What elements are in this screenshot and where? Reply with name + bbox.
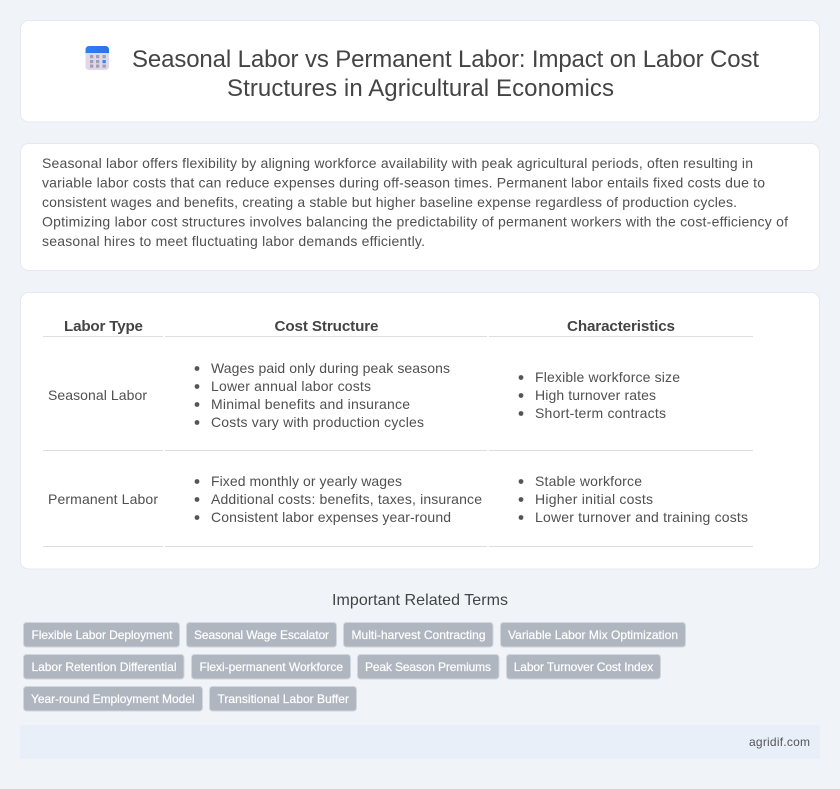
heading: important related terms: Important Related Terms xyxy=(332,592,508,609)
list: seasonal characteristics: Flexible workforce size xyxy=(535,369,680,385)
tag: Labor Retention Differential xyxy=(32,660,176,674)
text block: summary paragraph: variable labor costs that can reduce expenses during off-season times. Permanent labor entails fixed costs due to xyxy=(42,174,765,190)
text block: summary paragraph: Seasonal labor offers flexibility by aligning workforce availability with peak agricultural periods, often resulting in xyxy=(42,155,753,171)
icon: calendar xyxy=(86,46,109,70)
table header: Labor Type xyxy=(64,318,143,335)
text block: summary paragraph: Optimizing labor cost structures involves balancing the predictability of permanent workers with the cost-efficiency of xyxy=(42,214,788,230)
list: seasonal cost structure xyxy=(195,360,450,430)
list: permanent cost structure: Consistent labor expenses year-round xyxy=(211,509,451,525)
tag xyxy=(210,686,356,711)
list: seasonal characteristics xyxy=(519,369,680,421)
list: permanent cost structure: Fixed monthly or yearly wages xyxy=(211,473,402,489)
tag: Transitional Labor Buffer xyxy=(218,692,349,706)
row: seasonal labor xyxy=(43,360,753,451)
list: seasonal cost structure: Wages paid only during peak seasons xyxy=(211,360,450,376)
tag xyxy=(192,654,350,679)
tag: Flexi-permanent Workforce xyxy=(200,660,343,674)
tag: Peak Season Premiums xyxy=(365,660,491,674)
tag xyxy=(344,622,493,647)
text block: summary paragraph: seasonal hires to meet fluctuating labor demands efficiently. xyxy=(42,233,425,249)
tag: Labor Turnover Cost Index xyxy=(514,660,653,674)
footer xyxy=(20,725,820,759)
text block: summary paragraph: consistent wages and benefits, creating a stable but higher baseline expense regardless of production cycles. xyxy=(42,194,737,210)
tag: Seasonal Wage Escalator xyxy=(194,628,329,642)
list: seasonal cost structure: Lower annual labor costs xyxy=(211,378,371,394)
tag xyxy=(24,654,184,679)
list: seasonal cost structure: Minimal benefits and insurance xyxy=(211,396,410,412)
list: permanent cost structure xyxy=(195,473,482,525)
tag: Variable Labor Mix Optimization xyxy=(508,628,678,642)
panel: summary text xyxy=(20,144,820,270)
table header xyxy=(43,318,753,337)
list: permanent characteristics: Lower turnover and training costs xyxy=(535,509,748,525)
tag xyxy=(24,686,202,711)
row: seasonal labor: Seasonal Labor xyxy=(48,387,147,403)
list: permanent characteristics: Stable workforce xyxy=(535,473,642,489)
list: permanent characteristics xyxy=(519,473,748,525)
list: seasonal characteristics: Short-term contracts xyxy=(535,405,666,421)
list: permanent characteristics: Higher initial costs xyxy=(535,491,653,507)
row: permanent labor: Permanent Labor xyxy=(48,491,158,507)
panel: comparison table xyxy=(20,292,820,569)
tags: related terms xyxy=(24,622,686,711)
list: permanent cost structure: Additional costs: benefits, taxes, insurance xyxy=(211,491,482,507)
tag xyxy=(500,622,686,647)
list: seasonal characteristics: High turnover rates xyxy=(535,387,656,403)
tag: Year-round Employment Model xyxy=(31,692,194,706)
tag xyxy=(186,622,336,647)
text block: summary paragraph xyxy=(42,155,788,249)
table header: Cost Structure xyxy=(274,318,378,335)
title: Seasonal Labor vs Permanent Labor: Impact on Labor Cost xyxy=(132,46,759,73)
title xyxy=(132,46,759,102)
tag: Flexible Labor Deployment xyxy=(32,628,173,642)
footer: agridif.com xyxy=(749,735,810,749)
title: Structures in Agricultural Economics xyxy=(227,75,614,102)
list: seasonal cost structure: Costs vary with production cycles xyxy=(211,414,424,430)
tag: Multi-harvest Contracting xyxy=(352,628,486,642)
row: permanent labor xyxy=(43,473,753,547)
panel: header xyxy=(20,20,820,122)
tag xyxy=(506,654,660,679)
tag xyxy=(358,654,499,679)
table header: Characteristics xyxy=(567,318,675,335)
tag xyxy=(24,622,180,647)
